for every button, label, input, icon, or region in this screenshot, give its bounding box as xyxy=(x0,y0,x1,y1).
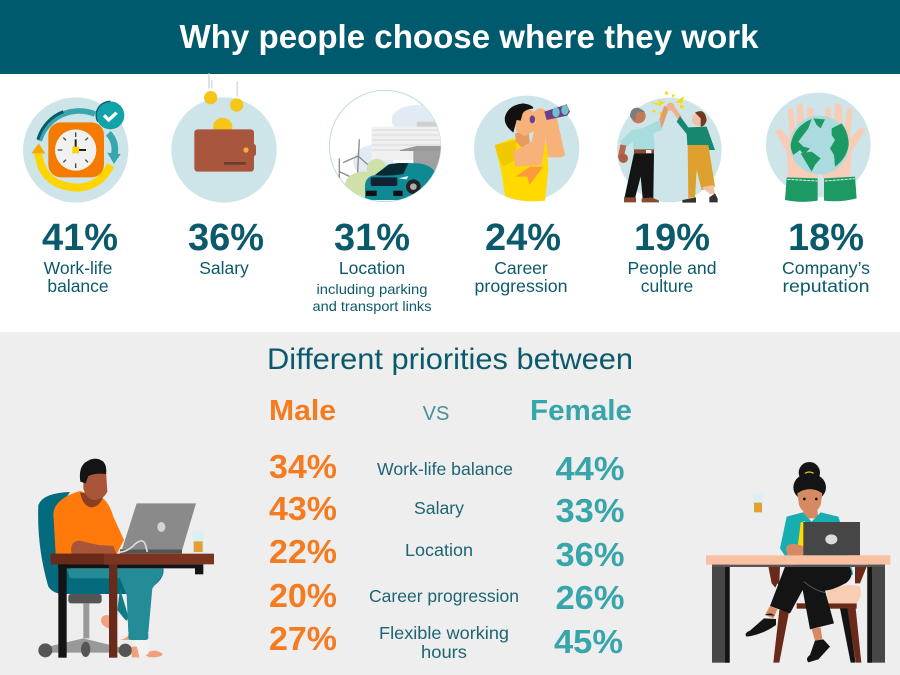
stat: people and culture: culture xyxy=(641,276,693,296)
row: flexible working hours: 45% xyxy=(554,624,623,661)
stat: location: 31% xyxy=(334,217,410,259)
row: salary: Salary xyxy=(414,498,464,518)
stat: work-life balance: 41% xyxy=(42,217,118,259)
versus label: VS xyxy=(423,403,449,425)
stat: company's reputation: 18% xyxy=(788,217,864,259)
icon: location with car and building xyxy=(329,90,443,202)
stat: work-life balance: Work-life xyxy=(44,258,112,278)
stat: company's reputation: Company’s xyxy=(782,258,870,278)
row: salary: 33% xyxy=(556,493,624,530)
row: work-life balance: 34% xyxy=(269,449,337,486)
stat: location: and transport links xyxy=(312,298,432,314)
row: work-life balance: Work-life balance xyxy=(377,459,513,479)
icon: person with binoculars xyxy=(474,96,579,201)
row: flexible working hours: hours xyxy=(421,642,467,662)
stat: location: including parking xyxy=(316,281,428,297)
stat: location: Location xyxy=(339,258,405,278)
icon: clock and work-life cycle xyxy=(23,97,128,203)
panel: top six reasons xyxy=(23,73,871,314)
stat: salary: Salary xyxy=(199,258,249,278)
icon: two people high-fiving xyxy=(617,92,722,203)
stat: people and culture: People and xyxy=(628,258,716,278)
stat: work-life balance xyxy=(42,217,118,296)
stat: people and culture: 19% xyxy=(634,217,710,259)
stat: location xyxy=(312,217,432,314)
row: flexible working hours xyxy=(269,621,623,662)
title banner: Why people choose where they work xyxy=(180,18,759,55)
row: work-life balance xyxy=(269,449,624,488)
panel: gender comparison xyxy=(0,332,900,675)
row: work-life balance: 44% xyxy=(556,451,624,488)
row: career progression: 20% xyxy=(269,578,337,615)
stat: salary: 36% xyxy=(188,217,264,259)
row: location: Location xyxy=(405,540,473,560)
title banner xyxy=(0,0,900,74)
row: career progression xyxy=(269,578,624,617)
stat: salary xyxy=(188,217,264,278)
illustration: woman at laptop xyxy=(706,462,890,663)
column heading: male: Male xyxy=(269,395,336,427)
row: salary: 43% xyxy=(269,491,337,528)
row: flexible working hours: 27% xyxy=(269,621,337,658)
row: career progression: 26% xyxy=(556,580,624,617)
icon: hands holding globe xyxy=(766,93,871,202)
stat: career progression: 24% xyxy=(485,217,561,259)
stat: company's reputation xyxy=(782,217,870,296)
heading: different priorities: Different priorities between xyxy=(267,343,633,376)
comparison table xyxy=(269,449,624,662)
stat: people and culture xyxy=(628,217,716,296)
stat: career progression xyxy=(474,217,568,296)
row: salary xyxy=(269,491,624,530)
stat: company's reputation: reputation xyxy=(782,276,870,296)
stat: career progression: Career xyxy=(494,258,548,278)
stat: career progression: progression xyxy=(474,276,568,296)
stat: work-life balance: balance xyxy=(47,276,109,296)
row: flexible working hours: Flexible working xyxy=(379,623,509,643)
icon: wallet and coins xyxy=(171,73,277,203)
row: location: 36% xyxy=(556,537,624,574)
row: location xyxy=(269,534,624,574)
illustration: man at laptop xyxy=(38,459,214,658)
row: location: 22% xyxy=(269,534,337,571)
column heading: female: Female xyxy=(530,395,632,427)
row: career progression: Career progression xyxy=(369,586,519,606)
